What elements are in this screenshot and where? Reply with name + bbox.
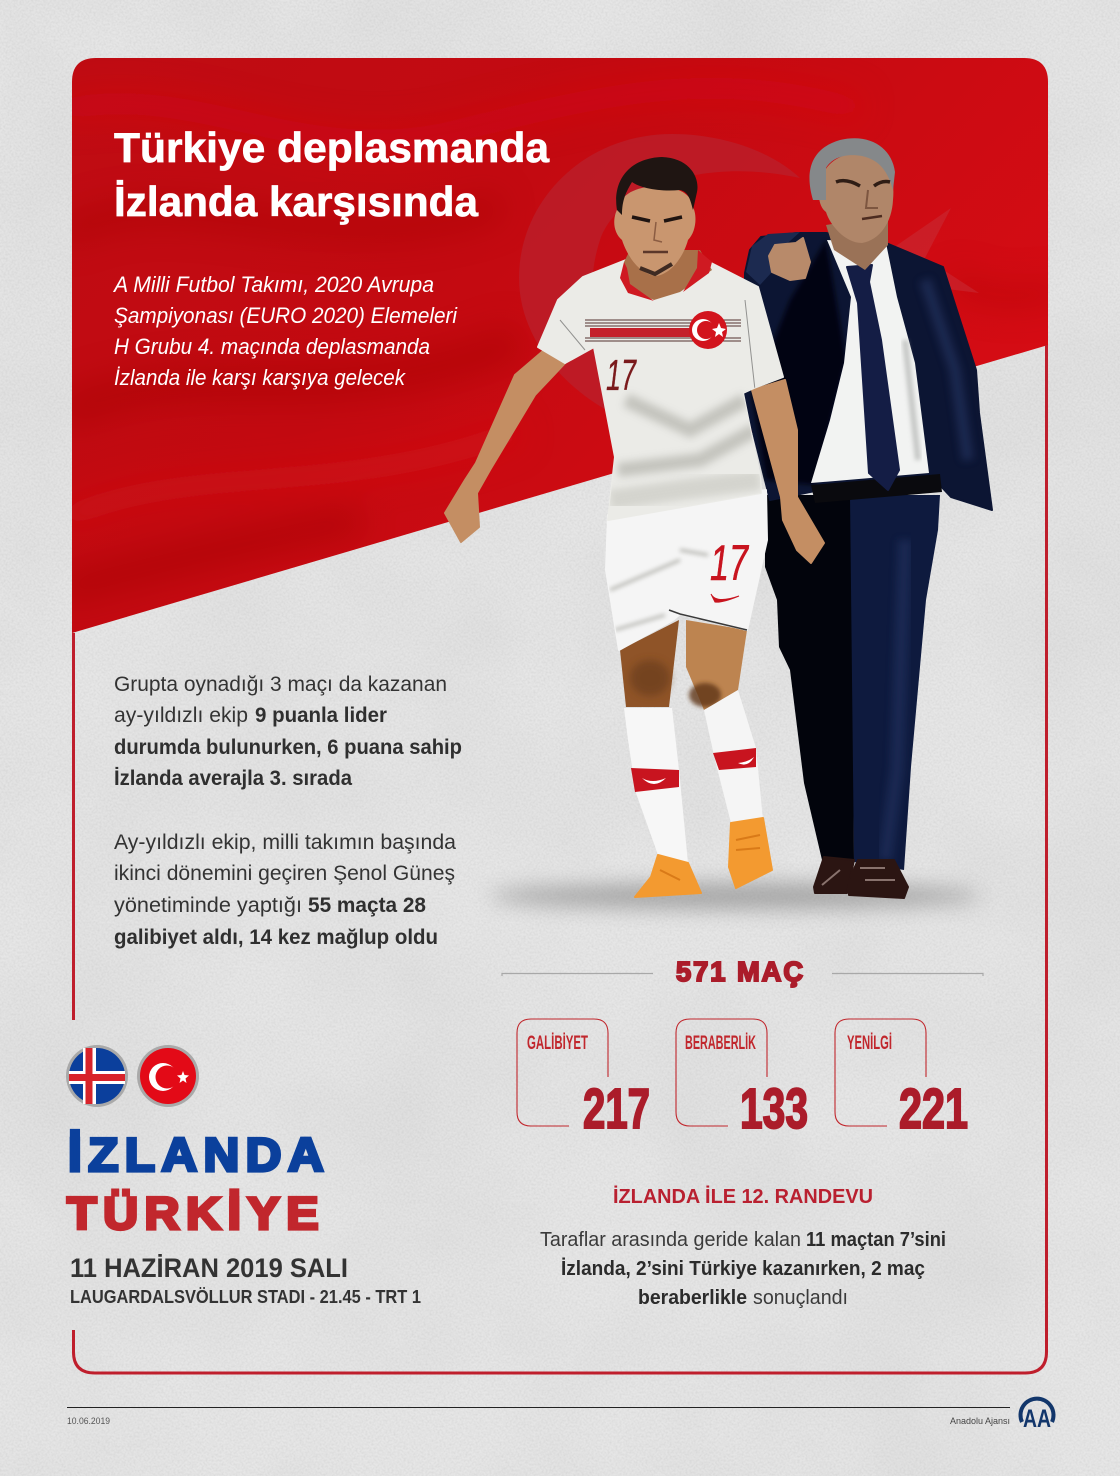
paragraph one: Grupta oynadığı 3 maçı da kazanan xyxy=(114,673,447,696)
shorts swoosh xyxy=(711,594,739,602)
coach arm sleeve xyxy=(746,232,800,285)
coach tie xyxy=(847,265,899,490)
coach trousers xyxy=(765,495,940,870)
stat: wins: GALİBİYET xyxy=(527,1033,588,1054)
title: Türkiye deplasmanda xyxy=(114,124,550,171)
paragraph one: durumda bulunurken, 6 puana sahip xyxy=(114,736,462,759)
coach belt xyxy=(811,474,942,503)
stat: draws: BERABERLİK xyxy=(685,1033,756,1054)
panel outline xyxy=(74,345,1046,1373)
player shirt xyxy=(538,260,783,520)
paragraph two: galibiyet aldı, 14 kez mağlup oldu xyxy=(114,926,438,949)
icon: Anadolu Agency logo xyxy=(1020,1399,1054,1433)
stat: losses: YENİLGİ xyxy=(847,1033,892,1054)
player head xyxy=(614,157,698,276)
stat: draws xyxy=(676,1019,808,1141)
intro text: Şampiyonası (EURO 2020) Elemeleri xyxy=(114,303,458,328)
player left arm xyxy=(445,345,568,542)
flag watermark: star xyxy=(896,208,978,293)
title: İzlanda karşısında xyxy=(114,178,479,225)
player neck and collar xyxy=(620,250,712,301)
player legs xyxy=(620,620,747,710)
icon: Anadolu Agency logo: AA xyxy=(1023,1405,1051,1433)
match venue: LAUGARDALSVÖLLUR STADI - 21.45 - TRT 1 xyxy=(70,1287,421,1307)
history text: sonuçlandı xyxy=(753,1287,848,1309)
panel: red flag header xyxy=(60,58,1060,638)
stat: wins: 217 xyxy=(583,1077,650,1141)
coach hand xyxy=(769,238,810,280)
match date: 11 HAZİRAN 2019 SALI xyxy=(70,1253,348,1283)
coach neck and head xyxy=(809,138,895,270)
flag watermark: crescent xyxy=(519,134,800,412)
paragraph two: ikinci dönemini geçiren Şenol Güneş xyxy=(114,862,455,885)
footer xyxy=(67,1399,1054,1433)
history text xyxy=(540,1229,946,1309)
footer credit: Anadolu Ajansı xyxy=(950,1416,1010,1426)
paragraph one: İzlanda averajla 3. sırada xyxy=(114,767,352,790)
shirt stripes xyxy=(585,320,741,341)
history heading: İZLANDA İLE 12. RANDEVU xyxy=(613,1185,873,1208)
shirt number: 17 xyxy=(606,351,637,400)
paragraph one: 9 puanla lider xyxy=(255,704,387,727)
stat: wins xyxy=(517,1019,650,1141)
figure: coach xyxy=(745,138,992,898)
stat: losses: 221 xyxy=(899,1077,968,1141)
history text: İzlanda, 2’sini Türkiye kazanırken, 2 maç xyxy=(561,1257,925,1280)
player boots xyxy=(635,818,772,897)
intro text: İzlanda ile karşı karşıya gelecek xyxy=(114,365,406,390)
coach shoes xyxy=(814,857,908,898)
stat: losses xyxy=(835,1019,968,1141)
paragraph two: 55 maçta 28 xyxy=(308,894,426,917)
paragraph one: ay-yıldızlı ekip xyxy=(114,704,248,727)
figure: player xyxy=(445,157,824,897)
footer date: 10.06.2019 xyxy=(67,1416,110,1426)
coach shirt xyxy=(811,240,929,483)
coach jacket xyxy=(745,233,992,510)
intro text xyxy=(112,272,458,390)
paragraph two: yönetiminde yaptığı xyxy=(114,894,302,917)
history text: 11 maçtan 7’sini xyxy=(806,1229,946,1251)
match title: İzlanda: İZLANDA xyxy=(68,1128,330,1181)
paragraph two: Ay-yıldızlı ekip, milli takımın başında xyxy=(114,831,456,854)
match title: Türkiye: TÜRKİYE xyxy=(67,1188,325,1239)
history text: Taraflar arasında geride kalan xyxy=(540,1229,801,1251)
shorts number: 17 xyxy=(710,535,749,591)
intro text: H Grubu 4. maçında deplasmanda xyxy=(114,334,430,359)
player right arm xyxy=(752,380,824,563)
shirt badge xyxy=(689,311,727,349)
icon: Iceland flag xyxy=(66,1045,128,1107)
player socks xyxy=(624,690,763,863)
title xyxy=(114,124,550,225)
stats heading: 571 MAÇ xyxy=(676,956,805,987)
stat: draws: 133 xyxy=(740,1077,808,1141)
paragraph two xyxy=(114,831,456,949)
left text block xyxy=(114,673,462,949)
intro text: A Milli Futbol Takımı, 2020 Avrupa xyxy=(112,272,434,297)
ground shadow xyxy=(490,883,980,909)
player shorts xyxy=(606,490,767,650)
paragraph one xyxy=(114,673,462,790)
history text: beraberlikle xyxy=(638,1287,747,1309)
icon: Turkey flag xyxy=(137,1045,199,1107)
